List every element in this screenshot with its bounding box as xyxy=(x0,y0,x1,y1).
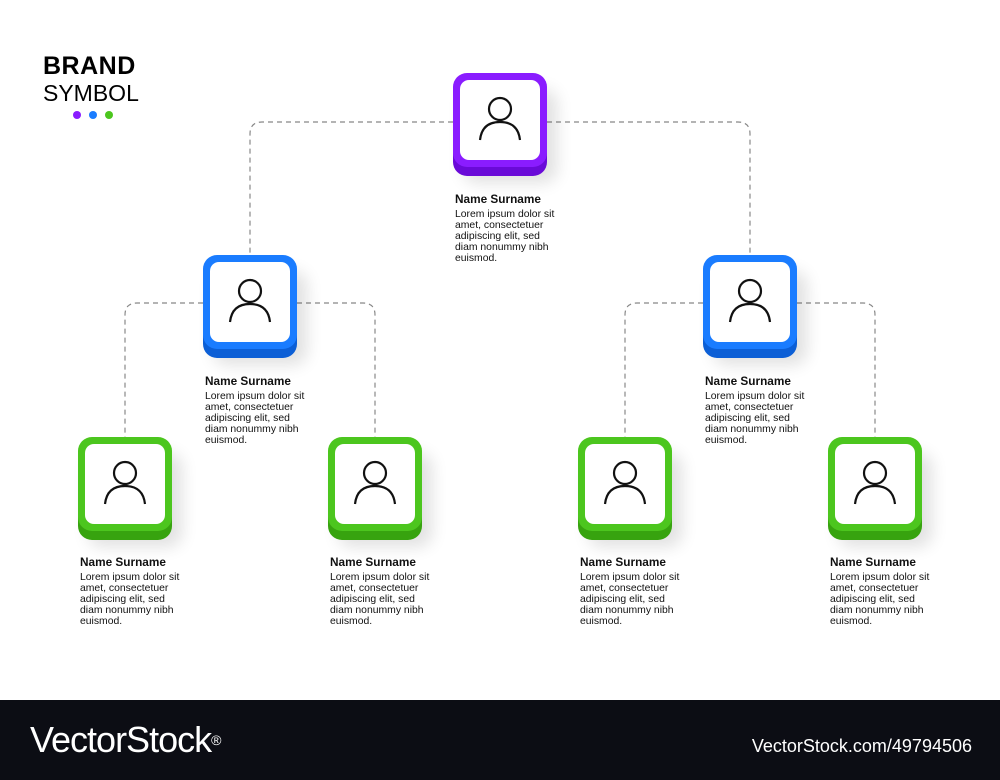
text: leaf 3: euismod. xyxy=(580,616,622,627)
footer logo: VectorStock® xyxy=(30,719,220,760)
text: leaf 2: Name Surname xyxy=(330,555,416,569)
text: mid right: amet, consectetuer xyxy=(705,402,793,413)
text: mid right: adipiscing elit, sed xyxy=(705,413,790,424)
text: leaf 4: adipiscing elit, sed xyxy=(830,594,915,605)
text: mid left: euismod. xyxy=(205,435,247,446)
text: leaf 2: Lorem ipsum dolor sit xyxy=(330,572,429,583)
brand logo xyxy=(43,52,139,119)
text: top: Name Surname xyxy=(455,192,541,206)
node: leaf 4 xyxy=(828,437,936,552)
node: top xyxy=(453,73,562,188)
text: leaf 2 xyxy=(330,555,430,627)
text: leaf 2: amet, consectetuer xyxy=(330,583,418,594)
text: top: euismod. xyxy=(455,253,497,264)
footer url: VectorStock.com/49794506 xyxy=(752,736,972,756)
text: leaf 2: euismod. xyxy=(330,616,372,627)
brand logo: BRAND xyxy=(43,52,136,80)
text: leaf 1: Lorem ipsum dolor sit xyxy=(80,572,179,583)
text: leaf 3 xyxy=(580,555,680,627)
node: mid left xyxy=(203,255,312,370)
text: leaf 3: amet, consectetuer xyxy=(580,583,668,594)
node: mid right xyxy=(703,255,812,370)
text: leaf 4 xyxy=(830,555,930,627)
text: mid left xyxy=(205,374,304,446)
text: mid right: Name Surname xyxy=(705,374,791,388)
text: leaf 3: diam nonummy nibh xyxy=(580,605,674,616)
node: leaf 2 xyxy=(328,437,436,552)
text: mid left: adipiscing elit, sed xyxy=(205,413,290,424)
text: leaf 4: Lorem ipsum dolor sit xyxy=(830,572,929,583)
text: leaf 2: diam nonummy nibh xyxy=(330,605,424,616)
text: mid left: Name Surname xyxy=(205,374,291,388)
text: leaf 3: Lorem ipsum dolor sit xyxy=(580,572,679,583)
text: leaf 1 xyxy=(80,555,180,627)
text: leaf 4: amet, consectetuer xyxy=(830,583,918,594)
text: leaf 3: adipiscing elit, sed xyxy=(580,594,665,605)
text: leaf 1: euismod. xyxy=(80,616,122,627)
node: leaf 1 xyxy=(78,437,186,552)
text: leaf 1: diam nonummy nibh xyxy=(80,605,174,616)
text: mid left: diam nonummy nibh xyxy=(205,424,299,435)
text: leaf 4: Name Surname xyxy=(830,555,916,569)
text: mid right: euismod. xyxy=(705,435,747,446)
text: leaf 4: diam nonummy nibh xyxy=(830,605,924,616)
text: leaf 1: Name Surname xyxy=(80,555,166,569)
text: mid left: Lorem ipsum dolor sit xyxy=(205,391,304,402)
text: leaf 4: euismod. xyxy=(830,616,872,627)
text: leaf 3: Name Surname xyxy=(580,555,666,569)
text: leaf 1: amet, consectetuer xyxy=(80,583,168,594)
text: leaf 2: adipiscing elit, sed xyxy=(330,594,415,605)
text: top: amet, consectetuer xyxy=(455,220,543,231)
node: leaf 3 xyxy=(578,437,686,552)
footer bar xyxy=(0,700,1000,780)
brand logo: SYMBOL xyxy=(43,80,139,106)
text: leaf 1: adipiscing elit, sed xyxy=(80,594,165,605)
text: top: diam nonummy nibh xyxy=(455,242,549,253)
text: top xyxy=(455,192,554,264)
text: mid right xyxy=(705,374,804,446)
text: mid right: diam nonummy nibh xyxy=(705,424,799,435)
text: mid right: Lorem ipsum dolor sit xyxy=(705,391,804,402)
text: top: Lorem ipsum dolor sit xyxy=(455,209,554,220)
text: top: adipiscing elit, sed xyxy=(455,231,540,242)
text: mid left: amet, consectetuer xyxy=(205,402,293,413)
